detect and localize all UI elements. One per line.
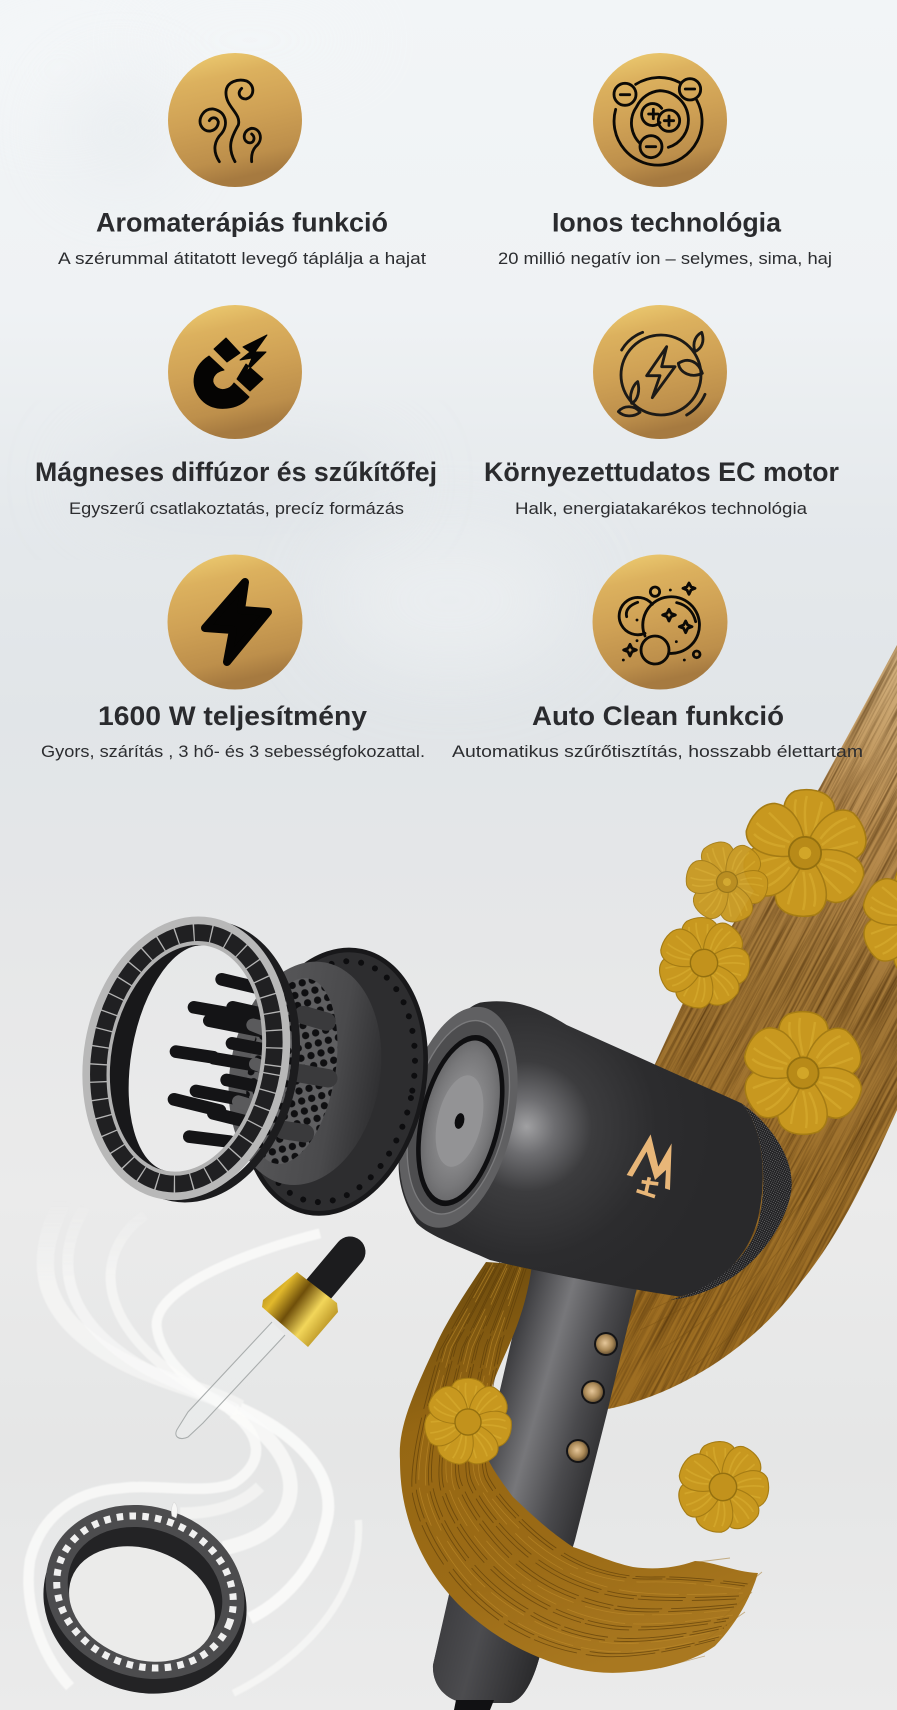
description: Gyors, szárítás , 3 hő- és 3 sebességfokozattal. bbox=[41, 742, 425, 761]
icon: ion atom bbox=[593, 53, 727, 187]
diffuser front ring bbox=[65, 904, 317, 1214]
oil ring bbox=[17, 1482, 273, 1710]
heading: Auto Clean funkció bbox=[532, 701, 784, 731]
dropper rubber bulb bbox=[318, 1252, 350, 1290]
cord bbox=[454, 1700, 494, 1710]
dryer buttons bbox=[566, 1332, 618, 1463]
dryer handle bbox=[433, 1265, 640, 1710]
flower middle bbox=[737, 1012, 869, 1134]
dropper glass tube bbox=[176, 1322, 285, 1439]
feature 1: aroma bbox=[96, 53, 388, 238]
dropper bbox=[176, 1252, 350, 1439]
gold flowers bbox=[421, 784, 897, 1544]
flower on curl bbox=[421, 1378, 514, 1469]
flower left bbox=[649, 911, 759, 1019]
feature 6: auto clean bbox=[532, 554, 784, 731]
flower large top bbox=[732, 784, 878, 922]
heading: 1600 W teljesítmény bbox=[98, 701, 367, 731]
diffuser back plate bbox=[219, 933, 449, 1231]
diffuser attachment bbox=[65, 904, 449, 1231]
icon: lightning bolt bbox=[168, 554, 302, 690]
feature 2: ion bbox=[552, 53, 782, 238]
hair dryer head bbox=[379, 995, 792, 1300]
flower free bbox=[667, 1434, 779, 1544]
heading: Ionos technológia bbox=[552, 208, 782, 238]
description: 20 millió negatív ion – selymes, sima, haj bbox=[498, 249, 832, 268]
dropper gold collar bbox=[262, 1272, 338, 1347]
feature 4: EC motor bbox=[484, 305, 839, 487]
knurled rear ring bbox=[670, 1103, 792, 1300]
hair strand: upper bbox=[272, 518, 897, 1539]
serum droplet bbox=[171, 1502, 177, 1518]
hair strand: lower curl bbox=[400, 1262, 762, 1673]
description: Automatikus szűrőtisztítás, hosszabb élettartam bbox=[452, 742, 863, 761]
icon: magnet bbox=[168, 305, 302, 439]
heading: Aromaterápiás funkció bbox=[96, 208, 388, 238]
description: Halk, energiatakarékos technológia bbox=[515, 499, 808, 518]
dryer body bbox=[399, 1001, 763, 1297]
heading: Környezettudatos EC motor bbox=[484, 457, 839, 487]
heading: Mágneses diffúzor és szűkítőfej bbox=[35, 457, 437, 487]
description: Egyszerű csatlakoztatás, precíz formázás bbox=[69, 499, 404, 518]
white serum swirls bbox=[29, 1200, 359, 1693]
brand logo bbox=[627, 1134, 672, 1197]
dryer front face bbox=[379, 995, 537, 1239]
diffuser pins bbox=[174, 979, 328, 1142]
icon: aroma swirls bbox=[168, 53, 302, 187]
icon: bubbles bbox=[592, 554, 728, 690]
feature 5: power bbox=[98, 554, 367, 731]
flower small behind bbox=[672, 829, 782, 935]
description: A szérummal átitatott levegő táplálja a hajat bbox=[58, 249, 426, 268]
icon: eco motor bbox=[593, 305, 727, 439]
flower right edge bbox=[857, 864, 897, 976]
diffuser cup bbox=[212, 949, 398, 1197]
feature 3: magnet bbox=[35, 305, 437, 487]
